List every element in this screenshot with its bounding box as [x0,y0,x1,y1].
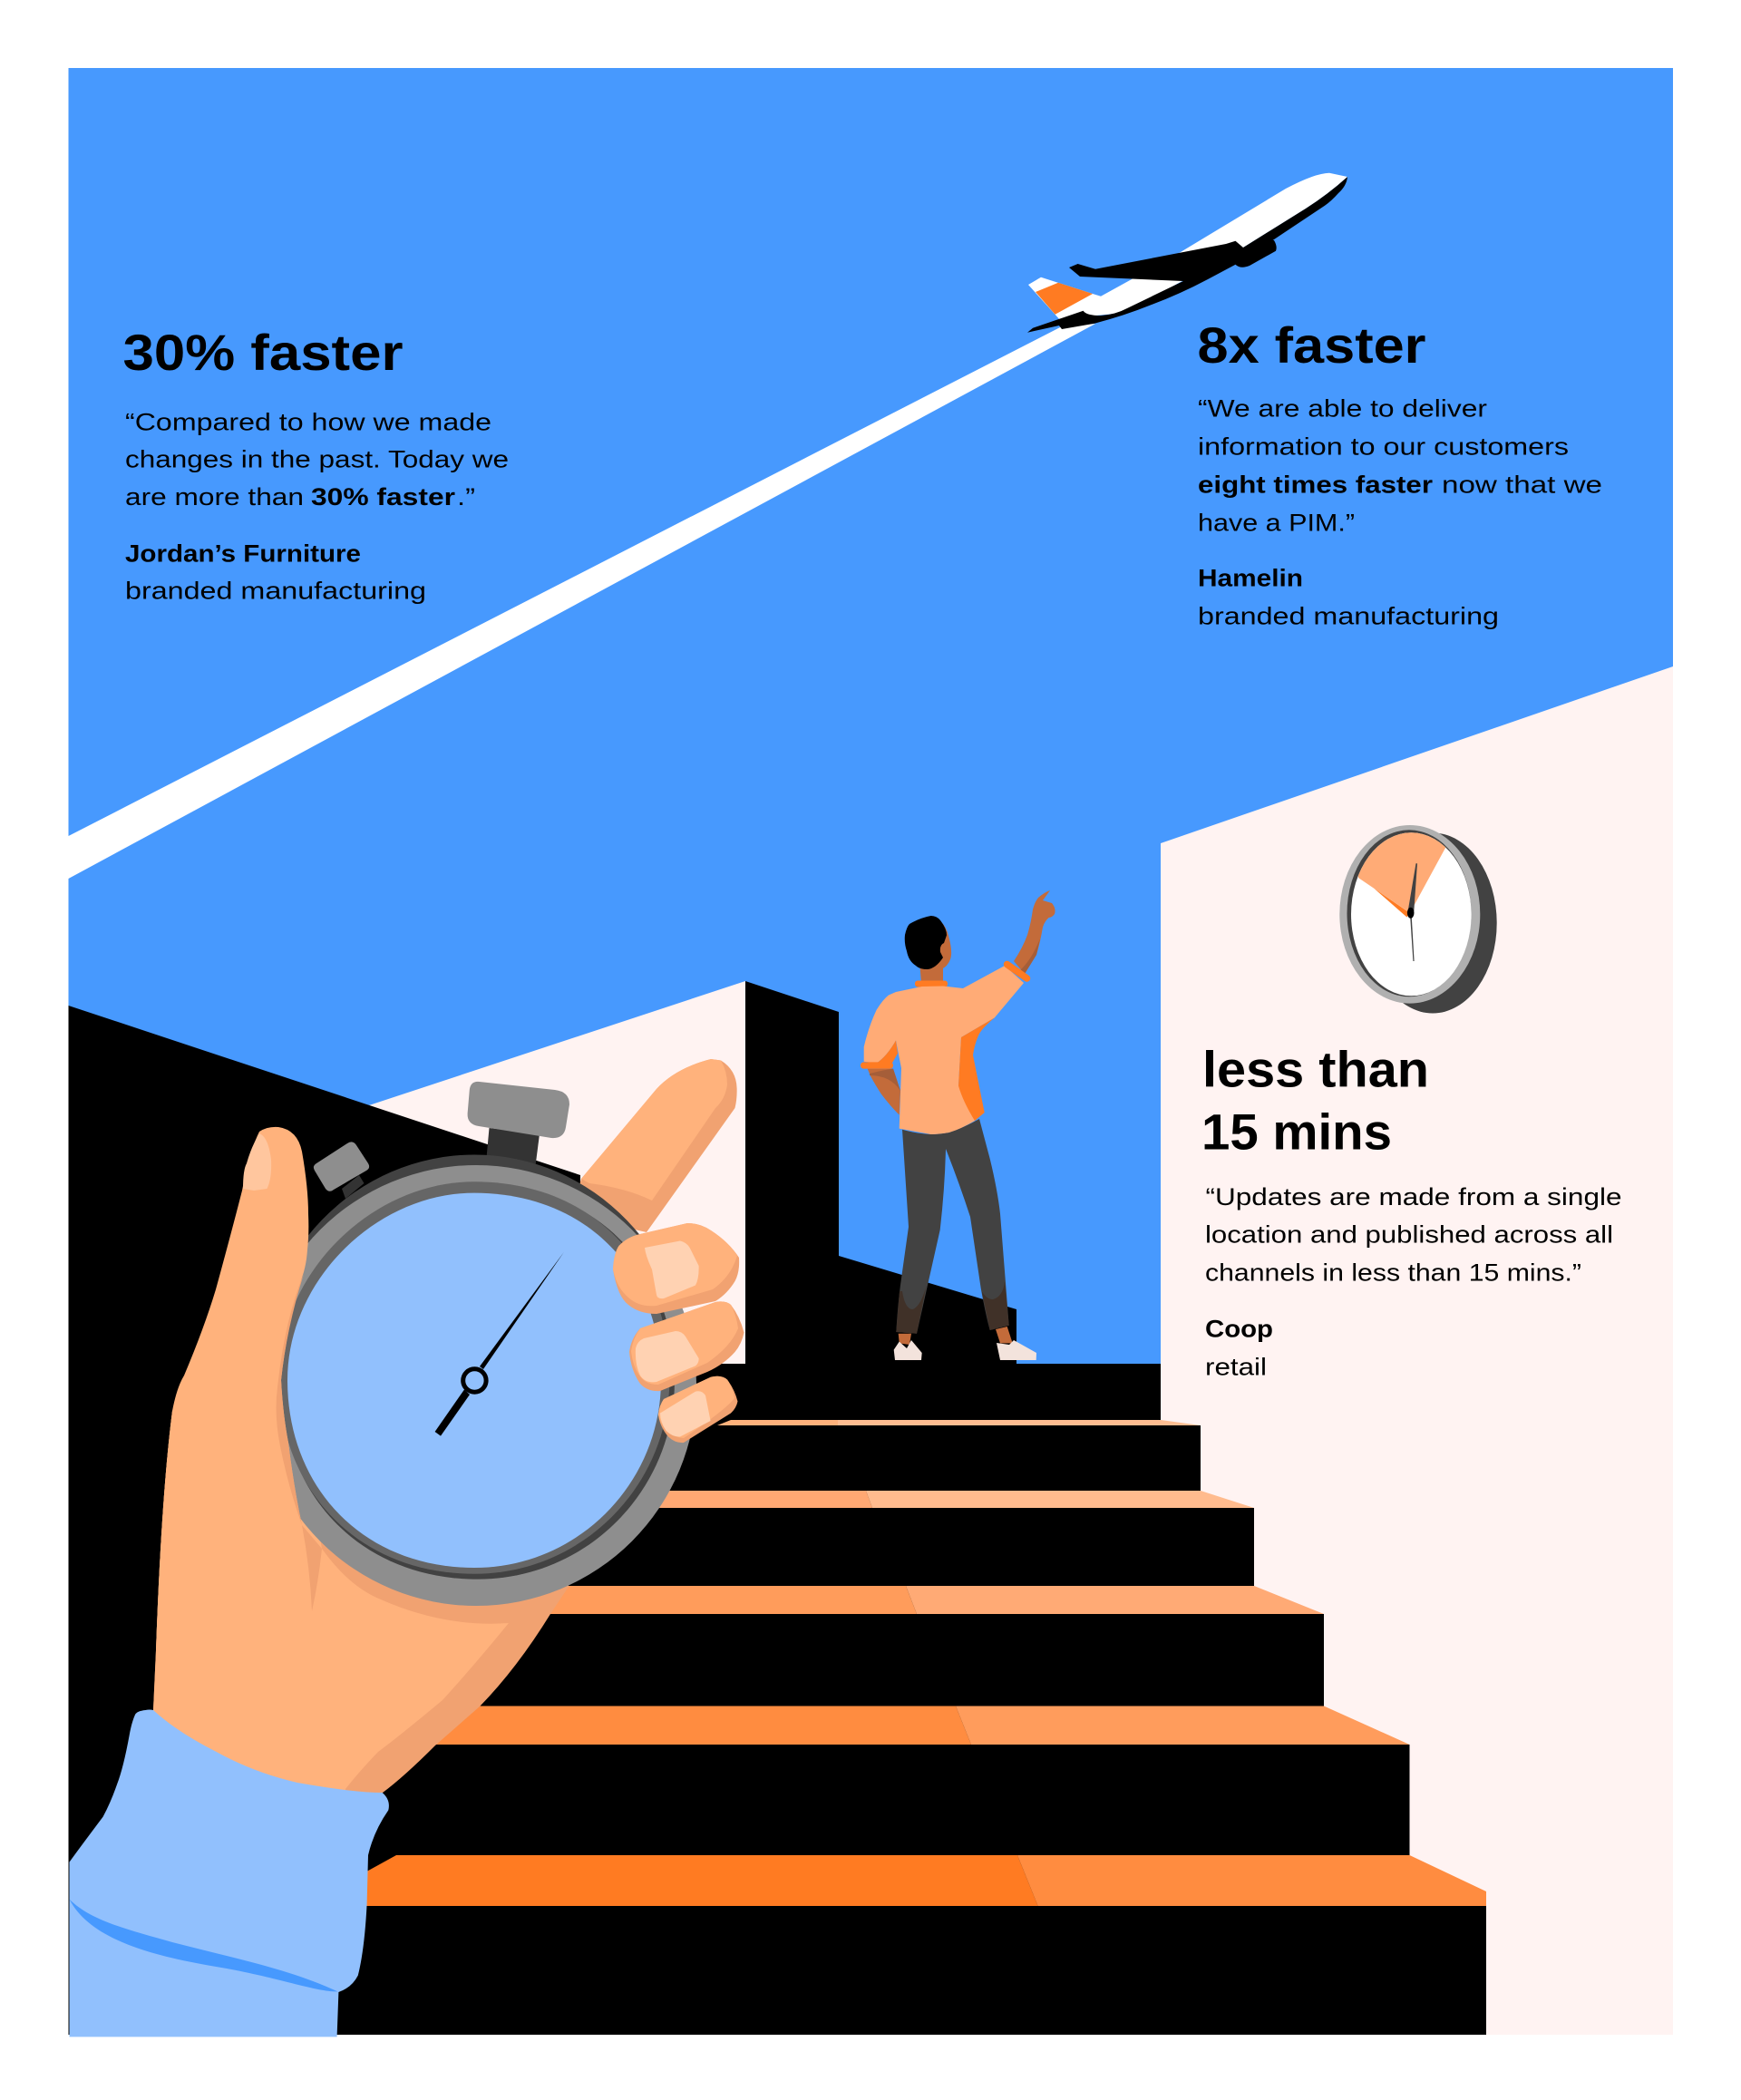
left forearm [868,1069,900,1115]
needle [435,1252,564,1436]
quote: channels in less than 15 mins.” [1205,1259,1581,1287]
top button stem [486,1128,540,1165]
source [1205,1315,1273,1381]
text block: 8x faster [1197,316,1602,630]
step 5 tread [336,1855,1486,1906]
quote [1205,1183,1621,1287]
man pointing at plane [861,890,1055,1360]
index finger [571,1059,737,1232]
thumb edge shade [277,1274,304,1525]
palm shadow layer [153,1288,569,1813]
airplane [1027,173,1347,333]
quote: .” [457,483,475,510]
collar [915,981,948,987]
step 1 tread [717,1420,1201,1425]
shirt [864,966,1024,1134]
finger shadow [571,1059,737,1232]
outer dark case [258,1155,690,1601]
underarm shade [877,1041,898,1065]
sleeve fold [69,1900,337,1991]
text block: less than 15 mins [1201,1040,1621,1381]
left shoe [894,1340,922,1360]
source: branded manufacturing [125,578,426,605]
hair [905,916,947,969]
tail stripe [1036,283,1093,315]
finger three light [658,1376,734,1438]
thumb nail [243,1133,271,1191]
shirt side shade [958,1017,995,1121]
sleeve [69,1710,389,2037]
heading: 15 mins [1201,1103,1392,1161]
finger one light [613,1223,737,1306]
quote: location and published across all [1205,1221,1613,1249]
finger one nail [645,1240,699,1298]
source: Hamelin [1198,565,1303,592]
clock inner rim [1347,830,1471,997]
source [1198,565,1499,630]
clock face [1351,832,1472,996]
clock rim [1339,825,1480,1004]
hand palm [153,1288,569,1813]
quote: eight times faster [1198,471,1434,498]
heading [1201,1040,1429,1161]
clock icon [1339,816,1497,1014]
source: branded manufacturing [1198,603,1499,630]
clock hands [1407,863,1417,961]
quote: are more than [125,483,304,510]
staircase [69,1006,1486,2035]
trouser lower left [896,1285,927,1334]
finger three [658,1376,738,1443]
quote [125,408,509,510]
wing, engine and underside [1027,177,1347,333]
panel: pink wall right [1161,666,1673,2035]
15 minute slice [1358,832,1445,918]
clock back [1368,832,1497,1014]
black column behind man [745,981,1016,1364]
source: Jordan’s Furniture [125,540,361,567]
top button cap [468,1082,569,1138]
source: retail [1205,1354,1267,1381]
raised arm shade [1020,938,1040,974]
quote: have a PIM.” [1198,509,1355,536]
black wall and risers [69,1006,1486,2035]
sleeve body [69,1710,389,2037]
source [125,540,426,605]
thumb body [156,1127,322,1650]
fuselage [1028,173,1347,319]
quote: information to our customers [1198,433,1569,460]
step 4 tread [417,1706,1409,1745]
finger three nail [660,1391,711,1437]
thumb [156,1127,322,1650]
heading: 8x faster [1197,316,1425,374]
quote: “We are able to deliver [1198,394,1487,422]
right cuff [1007,965,1026,978]
side button stem [342,1175,365,1199]
left cuff [861,1062,893,1069]
palm crease [302,1525,322,1611]
neck [919,961,943,983]
finger two base [629,1301,744,1391]
text block: 30% faster [123,324,509,605]
trouser lower right [982,1282,1009,1330]
quote [1198,394,1602,536]
finger two [629,1301,744,1391]
trousers [896,1119,1009,1334]
quote: “Updates are made from a single [1206,1183,1621,1210]
quote: changes in the past. Today we [125,446,509,473]
face [934,918,951,969]
quote: “Compared to how we made [125,408,491,435]
finger one base [613,1223,739,1314]
quote: 30% faster [311,483,456,510]
contrail [69,324,1095,879]
inner dark crescent [281,1184,675,1580]
finger light [581,1059,727,1201]
quote: now that we [1442,471,1602,498]
side button cap [314,1142,369,1191]
step 3 tread [535,1586,1324,1614]
source: Coop [1205,1315,1273,1342]
stopwatch [256,1082,696,1606]
panel: pink wall left triangle [369,981,745,1364]
raised arm [1014,890,1055,974]
watch face [287,1193,661,1568]
heading: 30% faster [123,324,403,381]
left forearm shade [870,1069,900,1091]
grey case [256,1165,696,1606]
finger one [613,1223,739,1314]
palm light layer [153,1288,509,1813]
finger two light [631,1301,738,1385]
heading: less than [1202,1040,1429,1097]
finger three base [658,1376,738,1443]
inner ring [279,1181,669,1574]
step 2 tread [635,1491,1254,1508]
finger two nail [636,1331,699,1382]
ankles [899,1327,1013,1345]
right shoe [997,1340,1036,1360]
